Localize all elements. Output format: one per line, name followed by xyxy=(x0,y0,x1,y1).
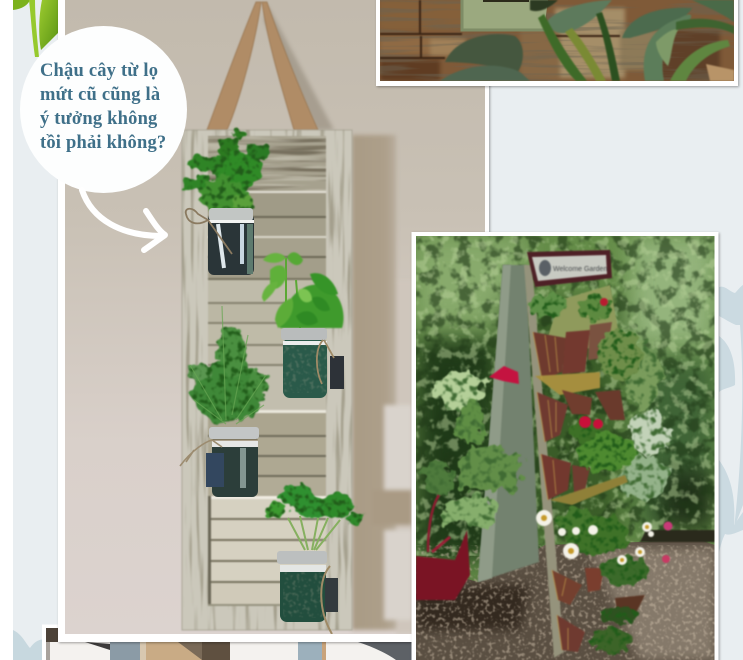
shutter shadow on wall xyxy=(352,133,412,634)
plant leaves xyxy=(440,0,734,81)
flowers xyxy=(489,298,672,565)
jar 1 with parsley xyxy=(181,130,269,275)
gravel ground xyxy=(416,540,715,660)
louvers xyxy=(208,191,326,604)
white photo frame xyxy=(58,0,489,642)
back a-frame board xyxy=(478,265,539,582)
watermark: pale shape bottom left xyxy=(13,630,46,660)
photo: shutter with herb jars, center xyxy=(58,0,489,642)
callout text: tồi phải không? xyxy=(40,133,166,153)
photo: brick wall with plants, top right xyxy=(376,0,738,86)
foliage background xyxy=(416,236,714,582)
top rail wood xyxy=(208,136,326,191)
shutter body xyxy=(182,130,352,630)
hanging strap shadow xyxy=(264,6,334,130)
callout text: ý tưởng không xyxy=(40,109,158,129)
callout text: mứt cũ cũng là xyxy=(40,85,160,105)
pockets xyxy=(533,285,645,652)
callout: speech bubble xyxy=(20,26,187,193)
callout text: Chậu cây từ lọ xyxy=(40,61,158,81)
foliage highlights xyxy=(421,345,670,528)
jar 4 with parsley xyxy=(265,483,364,634)
welcome sign: Welcome Garden xyxy=(553,266,607,273)
red basket xyxy=(416,488,470,600)
pocket plants xyxy=(530,293,649,652)
icon: green sprout top left xyxy=(13,0,58,57)
jar 3 with rosemary xyxy=(180,306,268,497)
photo: bottom window interior xyxy=(42,624,416,660)
burlap strap xyxy=(207,2,318,130)
pocket post xyxy=(524,265,564,658)
photo: vertical pocket garden, right xyxy=(412,232,718,660)
arrow: from bubble to jar xyxy=(82,190,165,250)
watermark: pale shapes right xyxy=(719,285,743,552)
jar 2 with basil xyxy=(262,252,344,398)
welcome sign xyxy=(527,250,612,287)
